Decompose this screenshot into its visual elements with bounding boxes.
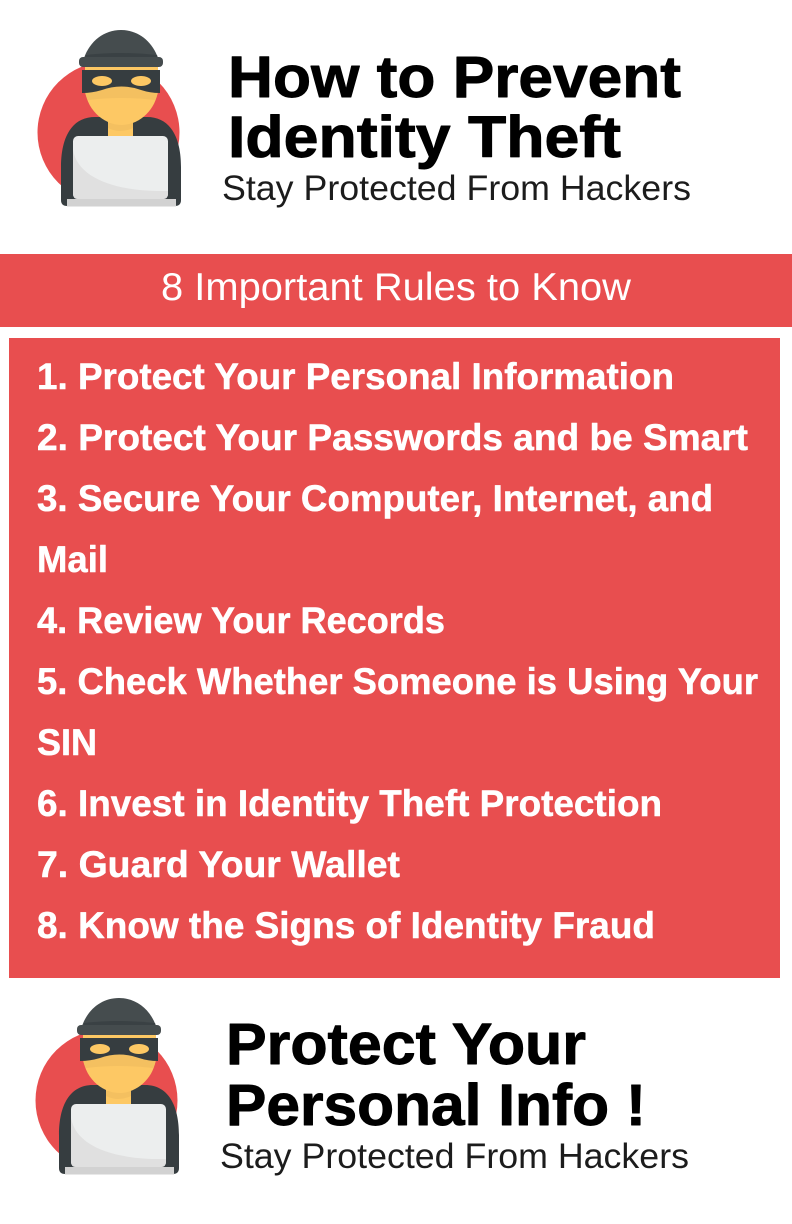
rule 5: 5. Check Whether Someone is Using Your bbox=[37, 661, 758, 702]
icon: masked hacker at laptop (top) bbox=[38, 30, 181, 206]
subtitle: Stay Protected From Hackers bbox=[222, 169, 691, 208]
rule 3: 3. Secure Your Computer, Internet, and bbox=[37, 478, 713, 519]
closing heading bbox=[226, 1012, 646, 1138]
closing heading: Protect Your bbox=[226, 1012, 586, 1077]
title: Identity Theft bbox=[228, 105, 621, 170]
rule 3: Mail bbox=[37, 539, 108, 580]
banner: 8 important rules: 8 Important Rules to Know bbox=[161, 266, 632, 309]
rule 1: 1. Protect Your Personal Information bbox=[37, 356, 674, 397]
panel: list of rules bbox=[9, 338, 780, 978]
rule 2: 2. Protect Your Passwords and be Smart bbox=[37, 417, 748, 458]
closing subtitle: Stay Protected From Hackers bbox=[220, 1137, 689, 1176]
rule 6: 6. Invest in Identity Theft Protection bbox=[37, 783, 662, 824]
rule 8: 8. Know the Signs of Identity Fraud bbox=[37, 905, 655, 946]
rule 5 bbox=[37, 661, 758, 763]
rule 5: SIN bbox=[37, 722, 97, 763]
rule 3 bbox=[37, 478, 713, 580]
rule 7: 7. Guard Your Wallet bbox=[37, 844, 400, 885]
title bbox=[228, 45, 681, 170]
closing heading: Personal Info ! bbox=[226, 1073, 646, 1138]
rule 4: 4. Review Your Records bbox=[37, 600, 445, 641]
title: How to Prevent bbox=[228, 45, 681, 110]
banner: 8 important rules bbox=[0, 254, 792, 327]
icon: masked hacker at laptop (bottom) bbox=[36, 998, 179, 1174]
